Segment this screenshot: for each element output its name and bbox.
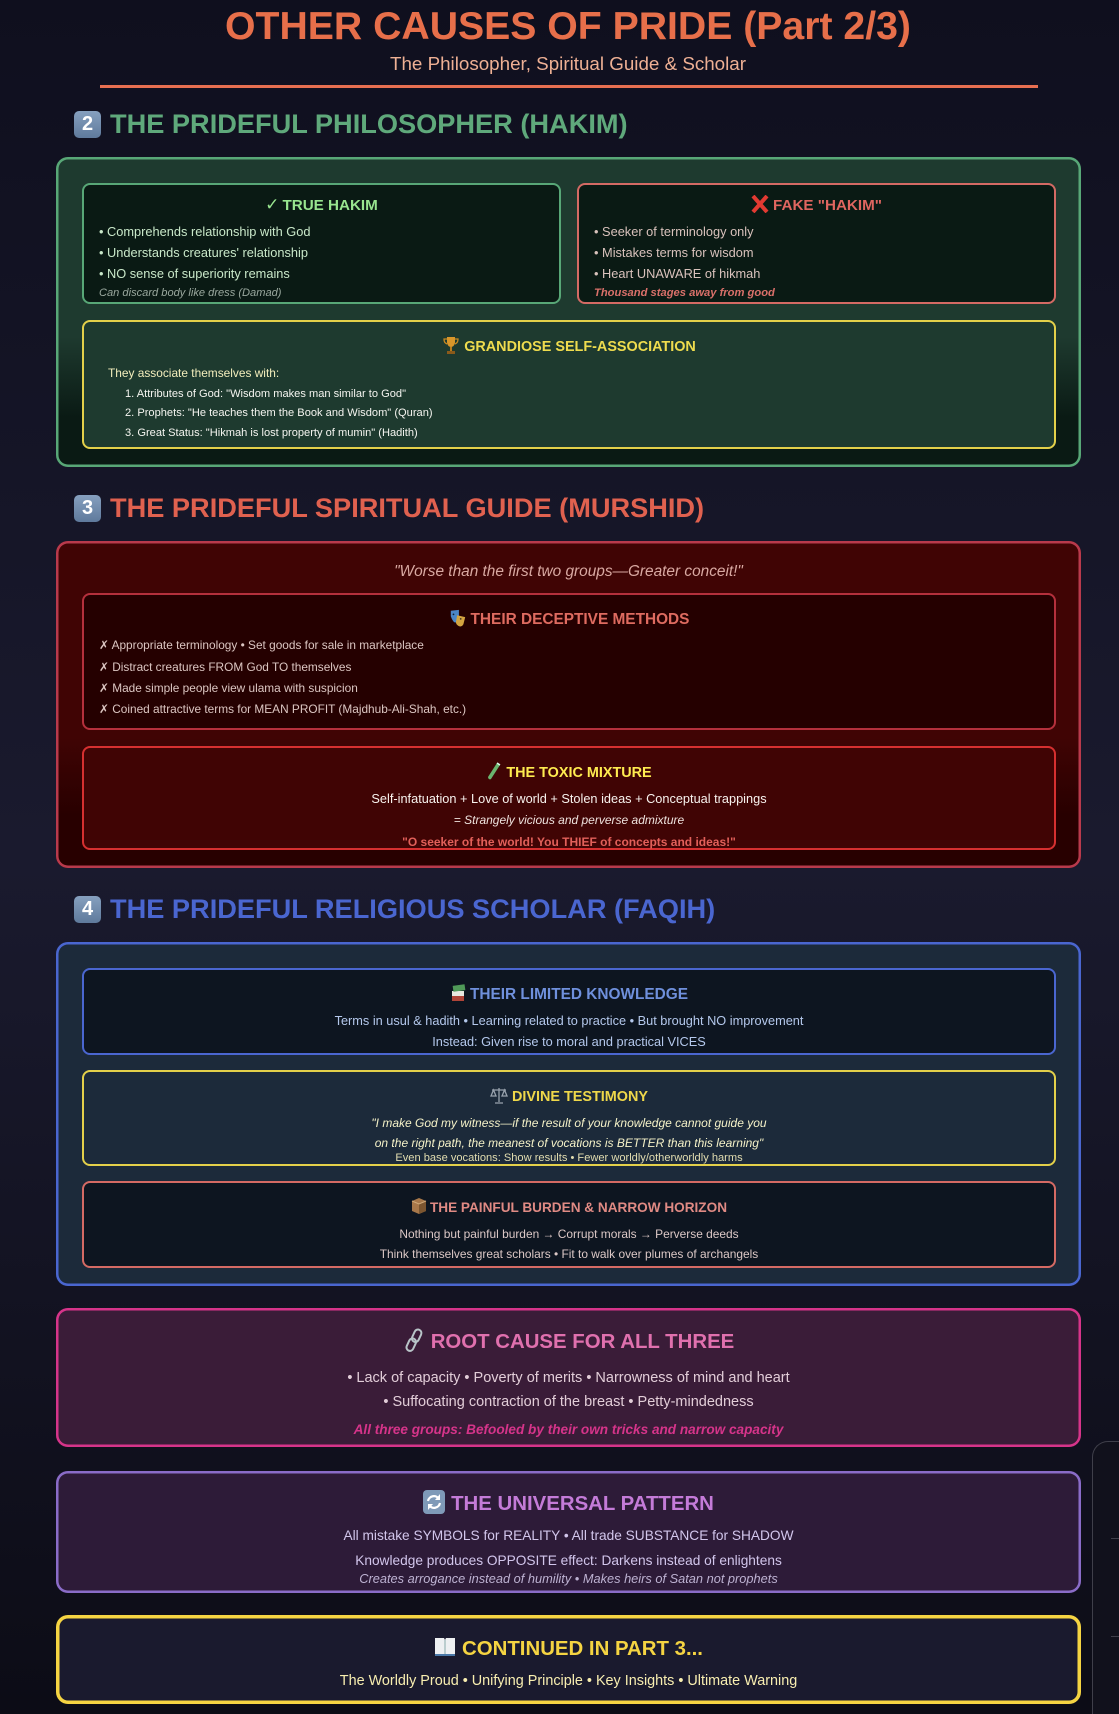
universal lines: All mistake SYMBOLS for REALITY • All trade SUBSTANCE for SHADOW: [343, 1528, 794, 1543]
faint side card outline: [1092, 1441, 1119, 1714]
panel: religious scholar: [56, 942, 1081, 1286]
root cause note: All three groups: Befooled by their own tricks and narrow capacity: [354, 1422, 783, 1437]
heading: prideful philosopher: [74, 108, 628, 139]
fake hakim heading: FAKE "HAKIM": [773, 197, 882, 214]
true hakim list: • Understands creatures' relationship: [99, 245, 308, 260]
box: fake hakim: [577, 183, 1056, 304]
methods heading: THEIR DECEPTIVE METHODS: [471, 611, 689, 628]
box: grandiose self-association: [82, 320, 1056, 449]
quote: "Worse than the first two groups—Greater conceit!": [394, 563, 743, 580]
box: painful burden: Think themselves great scholars • Fit to walk over plumes of archangels: [380, 1247, 758, 1261]
testimony quote: "I make God my witness—if the result of your knowledge cannot guide you: [371, 1116, 767, 1130]
box: deceptive methods: [82, 593, 1056, 730]
fake hakim list: • Mistakes terms for wisdom: [594, 245, 754, 260]
methods list: ✗ Distract creatures FROM God TO themselves: [99, 660, 351, 674]
box: true hakim: [82, 183, 561, 304]
subtitle: The Philosopher, Spiritual Guide & Scholar: [390, 53, 746, 74]
heading text: THE PRIDEFUL PHILOSOPHER (HAKIM): [110, 108, 628, 139]
testimony note: Even base vocations: Show results • Fewer worldly/otherworldly harms: [395, 1152, 743, 1164]
universal note: Creates arrogance instead of humility • Makes heirs of Satan not prophets: [359, 1571, 778, 1586]
box: toxic mixture: [82, 746, 1056, 850]
icon: keycap 4: 4: [82, 898, 93, 920]
true hakim list: • NO sense of superiority remains: [99, 266, 290, 281]
panel: root cause: • Suffocating contraction of the breast • Petty-mindedness: [383, 1394, 754, 1410]
knowledge heading: THEIR LIMITED KNOWLEDGE: [470, 986, 688, 1003]
true hakim list: Can discard body like dress (Damad): [99, 287, 282, 299]
fake hakim list: [594, 224, 775, 299]
methods list: [99, 638, 466, 716]
box: divine testimony: [82, 1070, 1056, 1166]
methods list: ✗ Made simple people view ulama with suspicion: [99, 681, 358, 695]
panel: philosopher: [56, 157, 1081, 467]
fake hakim list: • Seeker of terminology only: [594, 224, 754, 239]
panel: continued in part 3: [56, 1615, 1081, 1704]
burden lines: Nothing but painful burden → Corrupt morals → Perverse deeds: [399, 1227, 739, 1241]
continued line: The Worldly Proud • Unifying Principle • Key Insights • Ultimate Warning: [340, 1673, 797, 1689]
root cause heading: ROOT CAUSE FOR ALL THREE: [431, 1331, 734, 1353]
toxic heading: THE TOXIC MIXTURE: [506, 765, 652, 781]
heading: prideful religious scholar: [74, 893, 715, 924]
fake hakim list: • Heart UNAWARE of hikmah: [594, 266, 760, 281]
title: OTHER CAUSES OF PRIDE (Part 2/3): [225, 5, 911, 48]
panel: universal pattern: Knowledge produces OPPOSITE effect: Darkens instead of enlightens: [355, 1553, 782, 1568]
fake hakim list: Thousand stages away from good: [594, 287, 775, 299]
grandiose list: 3. Great Status: "Hikmah is lost property of mumin" (Hadith): [125, 427, 418, 439]
testimony heading: DIVINE TESTIMONY: [512, 1089, 648, 1105]
burden heading: THE PAINFUL BURDEN & NARROW HORIZON: [430, 1200, 727, 1215]
grandiose list: [108, 366, 433, 439]
true hakim list: • Comprehends relationship with God: [99, 224, 310, 239]
toxic quote: "O seeker of the world! You THIEF of concepts and ideas!": [402, 835, 736, 849]
heading text: THE PRIDEFUL SPIRITUAL GUIDE (MURSHID): [110, 492, 704, 523]
panel: spiritual guide: [56, 541, 1081, 868]
true hakim list: [99, 224, 310, 299]
panel: root cause: [56, 1308, 1081, 1447]
icon: keycap 3: 3: [82, 497, 93, 519]
grandiose list: They associate themselves with:: [108, 366, 279, 380]
continued heading: CONTINUED IN PART 3...: [462, 1638, 703, 1660]
methods list: ✗ Appropriate terminology • Set goods for sale in marketplace: [99, 638, 424, 652]
toxic result: = Strangely vicious and perverse admixture: [454, 813, 684, 827]
root cause lines: • Lack of capacity • Poverty of merits • Narrowness of mind and heart: [347, 1370, 790, 1386]
grandiose list: 2. Prophets: "He teaches them the Book and Wisdom" (Quran): [125, 407, 433, 419]
box: limited knowledge: Instead: Given rise to moral and practical VICES: [432, 1034, 706, 1049]
toxic formula: Self-infatuation + Love of world + Stolen ideas + Conceptual trappings: [371, 791, 767, 806]
methods list: ✗ Coined attractive terms for MEAN PROFIT (Majdhub-Ali-Shah, etc.): [99, 702, 466, 716]
box: painful burden: [82, 1181, 1056, 1268]
icon: keycap 3: [74, 495, 101, 522]
icon: keycap 2: [74, 111, 101, 138]
grandiose heading: GRANDIOSE SELF-ASSOCIATION: [464, 339, 696, 355]
universal heading: THE UNIVERSAL PATTERN: [451, 1493, 714, 1515]
panel: universal pattern: [56, 1471, 1081, 1593]
icon: keycap 2: 2: [82, 113, 93, 135]
grandiose list: 1. Attributes of God: "Wisdom makes man similar to God": [125, 388, 406, 400]
knowledge lines: Terms in usul & hadith • Learning related to practice • But brought NO improvement: [335, 1013, 803, 1028]
heading text: THE PRIDEFUL RELIGIOUS SCHOLAR (FAQIH): [110, 893, 715, 924]
true hakim heading: ✓ TRUE HAKIM: [265, 195, 378, 215]
heading: prideful spiritual guide: [74, 492, 704, 523]
box: divine testimony: on the right path, the meanest of vocations is BETTER than this learning": [375, 1136, 763, 1150]
icon: keycap 4: [74, 896, 101, 923]
box: limited knowledge: [82, 968, 1056, 1055]
